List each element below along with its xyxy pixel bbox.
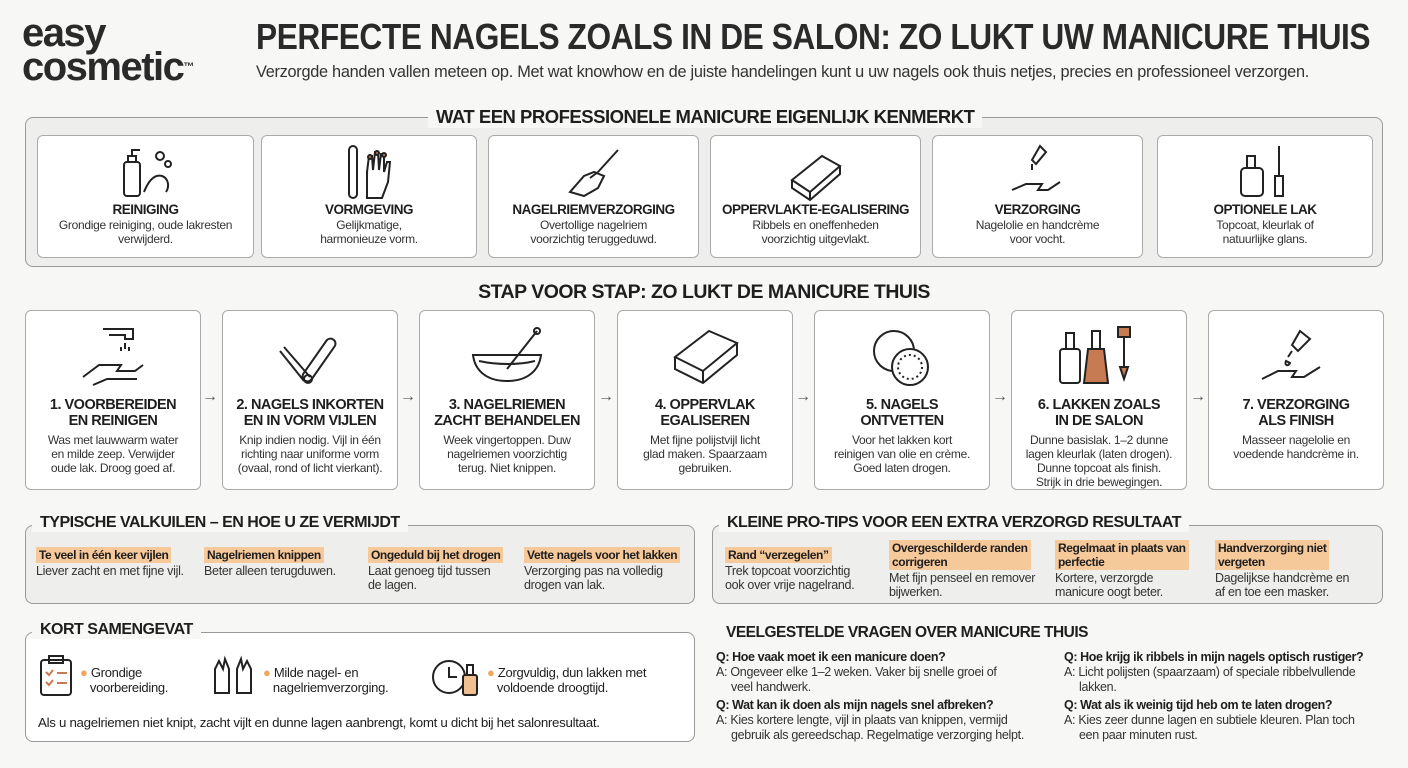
heading: KORT SAMENGEVAT (40, 621, 193, 638)
FAQ column right: Q: Hoe krijg ik ribbels in mijn nagels optisch rustiger? (1064, 650, 1363, 664)
tip 1: ook over vrije nagelrand. (725, 578, 854, 592)
step 7: Masseer nagelolie en (1242, 433, 1350, 447)
tip 2 (889, 540, 1036, 599)
card: nagelriemverzorging: NAGELRIEMVERZORGING (512, 202, 675, 217)
tip 4: Handverzorging niet (1218, 541, 1326, 555)
arrow: → (400, 388, 416, 405)
summary item 3: ● Zorgvuldig, dun lakken met (487, 665, 646, 680)
pitfall 1: Te veel in één keer vijlen (39, 548, 168, 562)
tip 1: Trek topcoat voorzichtig (725, 564, 850, 578)
step 1: EN REINIGEN (69, 413, 157, 429)
card: nagelriemverzorging (488, 135, 699, 258)
step 5: reinigen van olie en crème. (834, 447, 970, 461)
summary item 2: ● Milde nagel- en (263, 665, 358, 680)
step 1 (25, 310, 201, 490)
tip 1 (725, 547, 854, 592)
step 6: IN DE SALON (1055, 413, 1143, 429)
card: optionele lak: Topcoat, kleurlak of (1216, 218, 1314, 232)
step 2: (ovaal, rond of licht vierkant). (238, 461, 382, 475)
card: reiniging (37, 135, 254, 258)
summary item 2 (214, 656, 388, 695)
step 1: Was met lauwwarm water (48, 433, 178, 447)
tip 1: Rand “verzegelen” (728, 548, 829, 562)
pitfall 4 (524, 547, 680, 592)
FAQ column left (716, 650, 1024, 742)
step 3: Week vingertoppen. Duw (443, 433, 571, 447)
arrow: → (598, 388, 614, 405)
panel: pro tips (712, 525, 1383, 604)
subtitle: Verzorgde handen vallen meteen op. Met wat knowhow en de juiste handelingen kunt u uw nagels ook thuis netjes, precies en professioneel verzorgen. (256, 62, 1309, 81)
tip 4: vergeten (1218, 555, 1265, 569)
heading: step by step: STAP VOOR STAP: ZO LUKT DE MANICURE THUIS (478, 281, 930, 303)
icon: buffer block (790, 154, 842, 202)
icon: dropper over hand (1012, 144, 1060, 191)
heading: KLEINE PRO-TIPS VOOR EEN EXTRA VERZORGD RESULTAAT (727, 514, 1181, 531)
step 6: 6. LAKKEN ZOALS (1038, 397, 1160, 413)
step 7: ALS FINISH (1258, 413, 1334, 429)
step 4: 4. OPPERVLAK (655, 397, 755, 413)
card: nagelriemverzorging: Overtollige nagelriem (540, 218, 647, 232)
step 5: Goed laten drogen. (853, 461, 951, 475)
tip 3 (1055, 540, 1189, 599)
pitfall 1: Liever zacht en met fijne vijl. (36, 564, 184, 578)
FAQ column right: lakken. (1079, 680, 1117, 694)
tip 3: Kortere, verzorgde (1055, 571, 1153, 585)
summary item 3 (432, 660, 646, 696)
tip 2: bijwerken. (889, 585, 942, 599)
card: reiniging: Grondige reiniging, oude lakresten (59, 218, 232, 232)
card: vormgeving: Gelijkmatige, (336, 218, 402, 232)
FAQ column right: een paar minuten rust. (1079, 728, 1197, 742)
step 6: Dunne topcoat als finish. (1037, 461, 1161, 475)
step 5: ONTVETTEN (860, 413, 944, 429)
icon: soap hands (123, 149, 172, 197)
FAQ column right: Q: Wat als ik weinig tijd heb om te laten drogen? (1064, 698, 1332, 712)
card: optionele lak: natuurlijke glans. (1223, 232, 1307, 246)
FAQ column left: veel handwerk. (731, 680, 811, 694)
card: verzorging: Nagelolie en handcrème (976, 218, 1099, 232)
card: vormgeving: VORMGEVING (325, 202, 413, 217)
tip 2: Overgeschilderde randen (892, 541, 1028, 555)
panel: professional manicure characteristics (25, 117, 1383, 267)
icon: clock and bottle (432, 660, 478, 696)
step 6: Strijk in drie bewegingen. (1036, 475, 1162, 489)
step 5: 5. NAGELS (866, 397, 938, 413)
logo (22, 11, 194, 89)
icon: clipboard (40, 655, 72, 696)
FAQ column left: Q: Hoe vaak moet ik een manicure doen? (716, 650, 945, 664)
step 3: nagelriemen voorzichtig (447, 447, 567, 461)
step 3 (419, 310, 595, 490)
summary item 3: voldoende droogtijd. (497, 680, 608, 695)
tip 2: Met fijn penseel en remover (889, 571, 1035, 585)
icon: dropper and hand (1262, 330, 1320, 380)
heading: TYPISCHE VALKUILEN – EN HOE U ZE VERMIJDT (40, 514, 400, 531)
tip 3: perfectie (1058, 555, 1104, 569)
logo: cosmetic™ (22, 45, 194, 89)
summary item 1: ● Grondige (80, 665, 142, 680)
step 3: 3. NAGELRIEMEN (449, 397, 565, 413)
icon: buffer (673, 330, 739, 384)
FAQ heading: VEELGESTELDE VRAGEN OVER MANICURE THUIS (726, 624, 1088, 641)
FAQ column left: A: Kies kortere lengte, vijl in plaats van knippen, vermijd (716, 713, 1007, 727)
step 4: EGALISEREN (660, 413, 750, 429)
FAQ column left: Q: Wat kan ik doen als mijn nagels snel afbreken? (716, 698, 993, 712)
step 6: lagen kleurlak (laten drogen). (1026, 447, 1172, 461)
step 1: 1. VOORBEREIDEN (50, 397, 176, 413)
pitfall 3 (368, 547, 503, 592)
icon: cuticle pusher (568, 149, 619, 198)
FAQ column left: gebruik als gereedschap. Regelmatige verzorging helpt. (731, 728, 1024, 742)
card: optionele lak: OPTIONELE LAK (1213, 202, 1316, 217)
icon: hands (214, 656, 252, 694)
card: reiniging: REINIGING (112, 202, 178, 217)
step 4: Met fijne polijstvijl licht (650, 433, 760, 447)
step 5 (814, 310, 990, 490)
arrow: → (1190, 388, 1206, 405)
summary item 1 (40, 655, 168, 696)
tip 3: Regelmaat in plaats van (1058, 541, 1186, 555)
card: egalisering: Ribbels en oneffenheden (752, 218, 879, 232)
step 3: ZACHT BEHANDELEN (434, 413, 580, 429)
arrow: → (992, 388, 1008, 405)
arrow: → (795, 388, 811, 405)
tip 2: corrigeren (892, 555, 947, 569)
arrow: → (202, 388, 218, 405)
pitfall 2 (204, 547, 336, 578)
step 3: terug. Niet knippen. (458, 461, 556, 475)
step 1: en milde zeep. Verwijder (51, 447, 175, 461)
card: reiniging: verwijderd. (118, 232, 173, 246)
step 2: EN IN VORM VIJLEN (244, 413, 376, 429)
summary item 2: nagelriemverzorging. (273, 680, 388, 695)
card: verzorging: voor vocht. (1010, 232, 1065, 246)
step 7 (1208, 310, 1384, 490)
summary item 1: voorbereiding. (90, 680, 168, 695)
title: PERFECTE NAGELS ZOALS IN DE SALON: ZO LUKT UW MANICURE THUIS (256, 16, 1370, 57)
tip 3: manicure oogt beter. (1055, 585, 1163, 599)
pitfall 3: Laat genoeg tijd tussen (368, 564, 490, 578)
step 2: Knip indien nodig. Vijl in één (239, 433, 381, 447)
step 4: gebruiken. (678, 461, 732, 475)
pitfall 4: drogen van lak. (524, 578, 605, 592)
step 2 (222, 310, 398, 490)
icon: polish bottles (1059, 326, 1131, 384)
card: verzorging: VERZORGING (995, 202, 1080, 217)
FAQ column left: A: Ongeveer elke 1–2 weken. Vaker bij snelle groei of (716, 665, 997, 679)
summary text: Als u nagelriemen niet knipt, zacht vijlt en dunne lagen aanbrengt, komt u dicht bij het salonresultaat. (38, 715, 600, 730)
panel: pitfalls (25, 525, 695, 604)
FAQ column right: A: Kies zeer dunne lagen en subtiele kleuren. Plan toch (1064, 713, 1355, 727)
pitfall 4: Verzorging pas na volledig (524, 564, 663, 578)
heading: WAT EEN PROFESSIONELE MANICURE EIGENLIJK KENMERKT (436, 106, 974, 127)
pitfall 3: Ongeduld bij het drogen (371, 548, 500, 562)
step 1: oude lak. Droog goed af. (51, 461, 175, 475)
tip 4: af en toe een masker. (1215, 585, 1329, 599)
step 6: Dunne basislak. 1–2 dunne (1030, 433, 1168, 447)
step 6 (1011, 310, 1187, 490)
FAQ column right: A: Licht polijsten (spaarzaam) of speciale ribbelvullende (1064, 665, 1355, 679)
tip 4: Dagelijkse handcrème en (1215, 571, 1349, 585)
card: egalisering (710, 135, 921, 258)
step 2: 2. NAGELS INKORTEN (236, 397, 384, 413)
step 4: glad maken. Spaarzaam (643, 447, 767, 461)
step 5: Voor het lakken kort (852, 433, 952, 447)
logo: easy (22, 11, 105, 55)
icon: clipper and file (279, 338, 336, 384)
step 7: voedende handcrème in. (1233, 447, 1359, 461)
card: optionele lak (1157, 135, 1373, 258)
card: egalisering: voorzichtig uitgevlakt. (762, 232, 869, 246)
step 2: richting naar uniforme vorm (241, 447, 379, 461)
card: vormgeving: harmonieuze vorm. (320, 232, 418, 246)
card: nagelriemverzorging: voorzichtig teruggeduwd. (530, 232, 657, 246)
icon: tap and hands (82, 328, 144, 386)
panel: summary (25, 632, 695, 742)
card: egalisering: OPPERVLAKTE-EGALISERING (722, 202, 909, 217)
pitfall 3: de lagen. (368, 578, 417, 592)
FAQ column right (1064, 650, 1363, 742)
pitfall 4: Vette nagels voor het lakken (527, 548, 677, 562)
icon: polish bottles (1240, 146, 1284, 197)
step 7: 7. VERZORGING (1242, 397, 1350, 413)
tip 4 (1215, 540, 1349, 599)
card: verzorging (932, 135, 1143, 258)
icon: file and hand (348, 145, 392, 199)
icon: cotton pads (873, 330, 929, 386)
step 4 (617, 310, 793, 490)
pitfall 2: Nagelriemen knippen (207, 548, 321, 562)
icon: bowl with stick (472, 327, 542, 382)
card: vormgeving (261, 135, 477, 258)
pitfall 1 (36, 547, 184, 578)
pitfall 2: Beter alleen terugduwen. (204, 564, 336, 578)
